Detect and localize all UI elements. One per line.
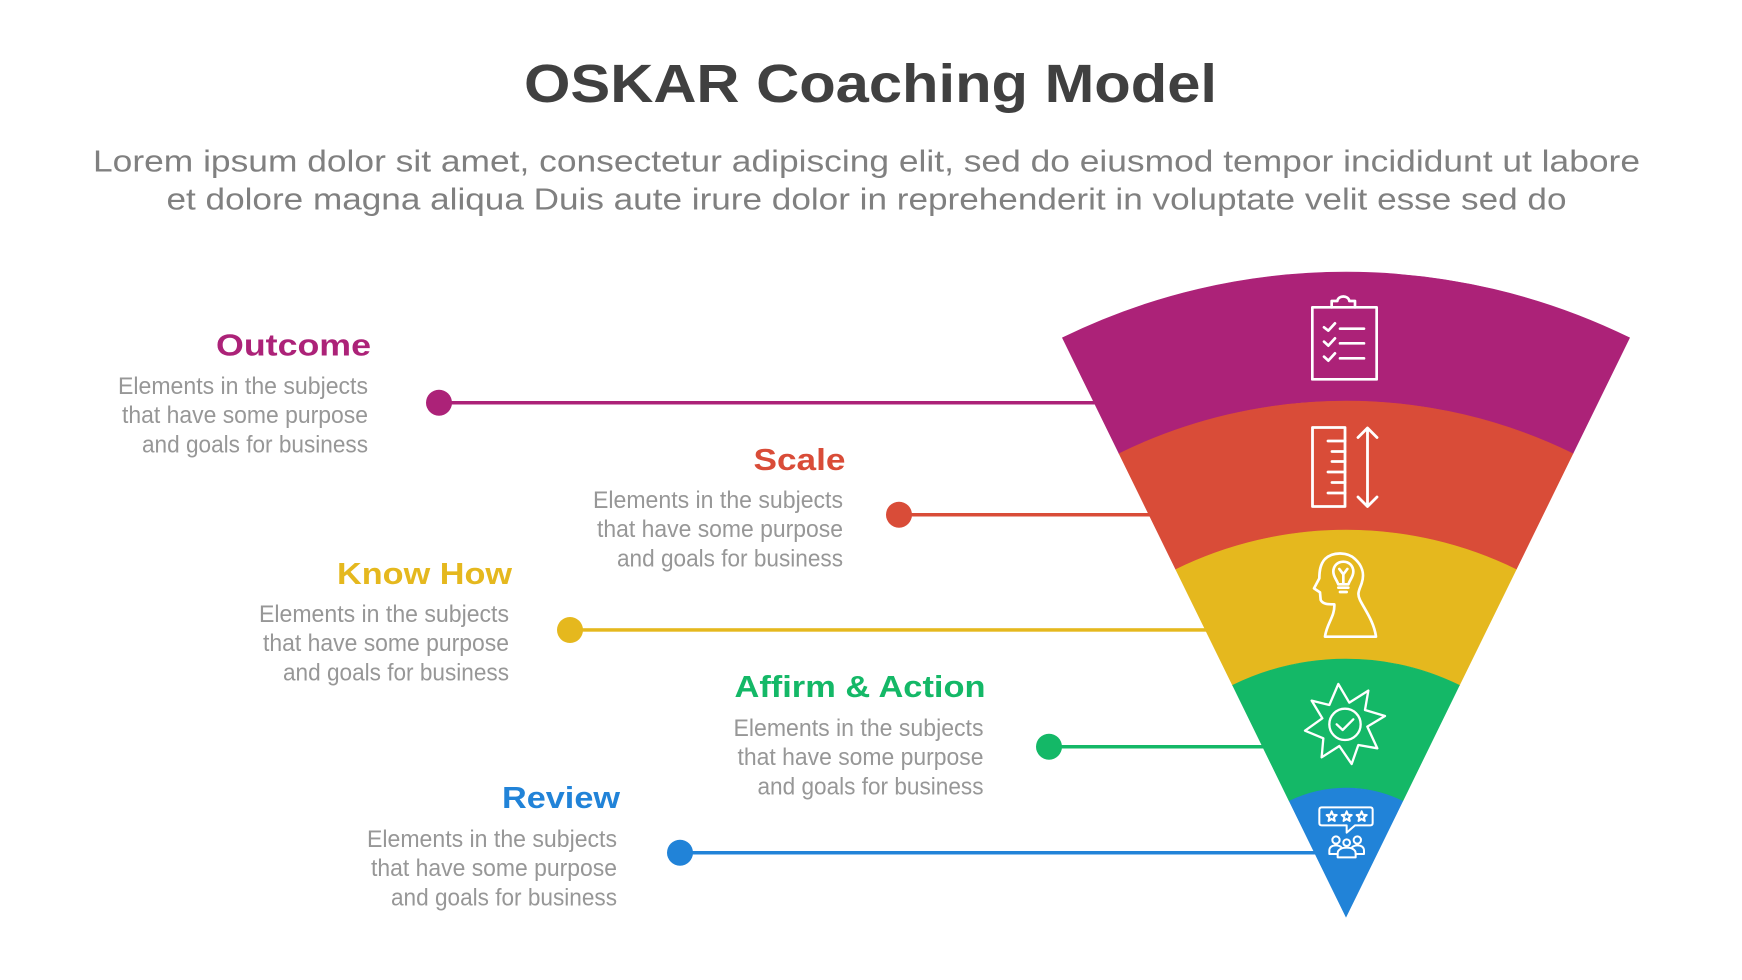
funnel band: review: [1289, 788, 1403, 917]
heading: Review: Review: [502, 780, 621, 815]
text block: Outcome description: and goals for business: [142, 432, 368, 459]
connector: review: [667, 840, 1320, 866]
text block: Know How description: [259, 601, 509, 687]
connector: know how: [557, 617, 1210, 643]
icon: star rating and people: [1319, 807, 1373, 857]
text block: Review description: and goals for business: [391, 885, 617, 912]
panel: know how label: [259, 556, 513, 687]
funnel band: scale: [1119, 401, 1573, 570]
connector: outcome: [426, 390, 1099, 416]
subtitle text: Lorem ipsum dolor sit amet, consectetur adipiscing elit, sed do eiusmod tempor incididunt ut labore: [93, 144, 1640, 178]
panel: outcome label: [118, 328, 371, 459]
heading: Know How: Know How: [337, 556, 513, 591]
panel: affirm and action label: [734, 669, 986, 801]
text block: Affirm & Action description: that have some purpose: [738, 744, 984, 771]
text block: Affirm & Action description: [734, 715, 984, 801]
text block: Affirm & Action description: Elements in the subjects: [734, 715, 984, 742]
icon: head with lightbulb: [1314, 553, 1376, 637]
connector: scale: [886, 502, 1154, 528]
funnel chart: [1062, 272, 1630, 917]
text block: Review description: [367, 826, 617, 912]
text block: Outcome description: [118, 373, 368, 459]
icon: badge with check: [1305, 684, 1385, 764]
text block: Review description: that have some purpose: [371, 855, 617, 882]
text block: Review description: Elements in the subjects: [367, 826, 617, 853]
text block: Know How description: Elements in the subjects: [259, 601, 509, 628]
heading: Affirm & Action: Affirm & Action: [734, 669, 986, 704]
funnel band: outcome: [1062, 272, 1630, 454]
title: OSKAR Coaching Model: [524, 54, 1217, 114]
text block: Scale description: that have some purpose: [597, 516, 843, 543]
panel: review label: [367, 780, 621, 912]
connector: affirm and action: [1036, 734, 1268, 760]
text block: Know How description: and goals for business: [283, 660, 509, 687]
icon: clipboard checklist: [1312, 296, 1377, 379]
text block: Scale description: [593, 487, 843, 573]
subtitle text: [93, 144, 1640, 216]
funnel band: know how: [1176, 530, 1516, 685]
panel: scale label: [593, 442, 846, 573]
text block: Know How description: that have some purpose: [263, 630, 509, 657]
text block: Outcome description: that have some purpose: [122, 402, 368, 429]
text block: Scale description: Elements in the subjects: [593, 487, 843, 514]
icon: ruler and arrow: [1312, 428, 1377, 506]
funnel band: affirm and action: [1233, 659, 1459, 801]
text block: Affirm & Action description: and goals for business: [758, 774, 984, 801]
text block: Scale description: and goals for business: [617, 546, 843, 573]
heading: Scale: Scale: [754, 442, 846, 477]
subtitle text: et dolore magna aliqua Duis aute irure dolor in reprehenderit in voluptate velit esse sed do: [166, 182, 1566, 216]
heading: Outcome: Outcome: [216, 328, 371, 362]
text block: Outcome description: Elements in the subjects: [118, 373, 368, 400]
